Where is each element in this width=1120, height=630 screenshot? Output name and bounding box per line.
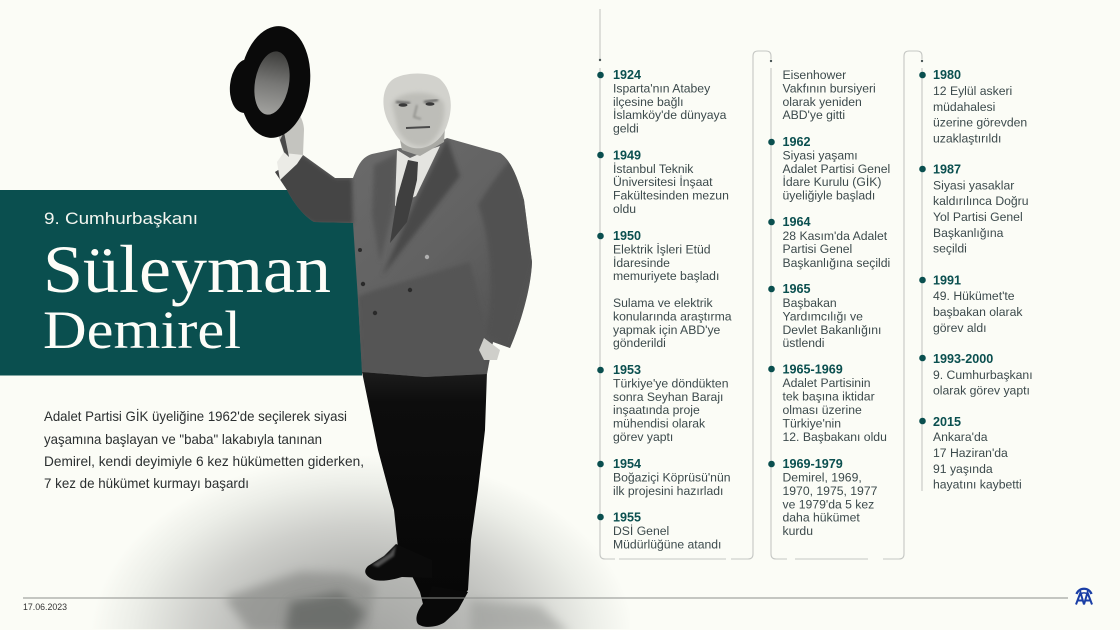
- entry 1969-1979: 1969-1979: [782, 457, 843, 471]
- entry 1965-1969: Türkiye'nin: [782, 416, 841, 430]
- entry 1969-1979: daha hükümet: [782, 510, 860, 524]
- entry 1962: Adalet Partisi Genel: [782, 162, 890, 176]
- entry 1969-1979: ve 1979'da 5 kez: [782, 498, 874, 512]
- entry 1954: 1954: [613, 457, 641, 471]
- entry 1950 continued: Vakfının bursiyeri: [782, 82, 876, 96]
- entry 1949: oldu: [613, 202, 636, 216]
- entry 2015: 91 yaşında: [933, 462, 993, 476]
- entry 1980: üzerine görevden: [933, 116, 1027, 130]
- entry 1953: mühendisi olarak: [613, 416, 706, 430]
- entry 1969-1979: Demirel, 1969,: [782, 470, 862, 484]
- entry 1965-1969: Adalet Partisinin: [782, 376, 871, 390]
- entry 1991: [919, 274, 1023, 335]
- entry 1962: 1962: [782, 135, 811, 149]
- entry 1965-1969: [768, 362, 887, 444]
- entry 1924: Isparta'nın Atabey: [613, 82, 711, 96]
- entry 1964: Başkanlığına seçildi: [782, 256, 890, 270]
- entry 1950: İdaresinde: [613, 256, 670, 270]
- intro paragraph: 7 kez de hükümet kurmayı başardı: [44, 476, 249, 491]
- entry 1980: [919, 68, 1027, 146]
- entry 2015: 2015: [933, 415, 961, 429]
- buttons: [358, 248, 412, 315]
- footer rule: [23, 598, 1068, 599]
- entry 1949: Fakültesinden mezun: [613, 188, 729, 202]
- entry 1991: 1991: [933, 274, 961, 288]
- entry 1965-1969: 1965-1969: [782, 362, 843, 376]
- title: Demirel: Demirel: [43, 300, 241, 360]
- entry 1949: Üniversitesi İnşaat: [613, 175, 713, 189]
- entry 1993-2000: olarak görev yaptı: [933, 384, 1030, 398]
- timeline column 2: [768, 68, 890, 538]
- entry 1987: [919, 162, 1029, 256]
- entry 1965: [768, 282, 881, 350]
- entry 1965: Devlet Bakanlığını: [782, 323, 881, 337]
- entry 1965: 1965: [782, 282, 811, 296]
- entry 1955: DSİ Genel: [613, 524, 669, 538]
- entry 1949: [597, 148, 729, 216]
- entry 1991: görev aldı: [933, 321, 987, 335]
- entry 1969-1979: [768, 457, 878, 538]
- entry 1950: konularında araştırma: [613, 310, 732, 324]
- entry 1965-1969: tek başına iktidar: [782, 390, 875, 404]
- entry 1987: Yol Partisi Genel: [933, 210, 1023, 224]
- entry 1950: Sulama ve elektrik: [613, 296, 713, 310]
- entry 1955: 1955: [613, 510, 641, 524]
- entry 1953: inşaatında proje: [613, 403, 700, 417]
- timeline connector lines: [600, 9, 922, 559]
- entry 1987: kaldırılınca Doğru: [933, 194, 1029, 208]
- entry 1964: 28 Kasım'da Adalet: [782, 229, 888, 243]
- intro paragraph: Adalet Partisi GİK üyeliğine 1962'de seçilerek siyasi: [44, 409, 347, 424]
- intro paragraph: [44, 409, 364, 491]
- entry 1950 continued: ABD'ye gitti: [782, 108, 845, 122]
- entry 1980: 12 Eylül askeri: [933, 84, 1012, 98]
- rocky ground behind figure: [113, 470, 612, 629]
- title: Süleyman: Süleyman: [43, 231, 331, 307]
- entry 1969-1979: kurdu: [782, 524, 813, 538]
- entry 1964: Partisi Genel: [782, 242, 852, 256]
- neck: [398, 128, 445, 156]
- entry 1962: üyeliğiyle başladı: [782, 188, 875, 202]
- entry 1924: ilçesine bağlı: [613, 95, 683, 109]
- entry 1954: Boğaziçi Köprüsü'nün: [613, 470, 731, 484]
- entry 1954: [597, 457, 731, 498]
- entry 1980: müdahalesi: [933, 100, 995, 114]
- entry 1964: [768, 215, 890, 270]
- hat inside: [250, 49, 294, 117]
- entry 2015: Ankara'da: [933, 430, 988, 444]
- date: 17.06.2023: [23, 602, 67, 612]
- shirt: [395, 146, 440, 206]
- entry 1924: İslamköy'de dünyaya: [613, 108, 727, 122]
- entry 1953: görev yaptı: [613, 430, 673, 444]
- entry 1965-1969: 12. Başbakanı oldu: [782, 430, 887, 444]
- entry 1965-1969: olması üzerine: [782, 403, 862, 417]
- entry 2015: [919, 415, 1022, 492]
- panel: title band: [0, 190, 362, 376]
- entry 1924: 1924: [613, 68, 641, 82]
- tie: [390, 160, 418, 243]
- pin: [425, 255, 429, 259]
- icon: AA logo: [1076, 589, 1092, 604]
- entry 1950: yapmak için ABD'ye: [613, 323, 721, 337]
- raised arm and jacket: [275, 138, 532, 377]
- entry 1950: 1950: [613, 229, 641, 243]
- entry 1953: 1953: [613, 363, 641, 377]
- shirt cuff: [277, 152, 303, 180]
- entry 1924: geldi: [613, 122, 639, 136]
- right shoe: [416, 586, 468, 627]
- subtitle: 9. Cumhurbaşkanı: [44, 210, 198, 228]
- intro paragraph: Demirel, kendi deyimiyle 6 kez hükümetten giderken,: [44, 454, 364, 469]
- entry 1987: 1987: [933, 162, 961, 176]
- entry 2015: hayatını kaybetti: [933, 478, 1022, 492]
- left shoe: [365, 544, 432, 581]
- entry 1993-2000: 9. Cumhurbaşkanı: [933, 368, 1033, 382]
- entry 1955: Müdürlüğüne atandı: [613, 538, 721, 552]
- entry 1950: gönderildi: [613, 336, 666, 350]
- entry 1950 continued: olarak yeniden: [782, 95, 862, 109]
- hat: [227, 23, 316, 141]
- trousers: [362, 372, 487, 624]
- entry 1953: Türkiye'ye döndükten: [613, 376, 728, 390]
- head: [383, 73, 451, 148]
- entry 1962: Siyasi yaşamı: [782, 148, 858, 162]
- entry 1980: 1980: [933, 68, 961, 82]
- entry 1950 continued: Eisenhower: [782, 68, 846, 82]
- entry 1965: üstlendi: [782, 336, 825, 350]
- jacket shading and lapels: [270, 138, 534, 378]
- hand: [279, 106, 304, 155]
- entry 1987: Başkanlığına: [933, 226, 1004, 240]
- entry 1969-1979: 1970, 1975, 1977: [782, 484, 878, 498]
- entry 1953: [597, 363, 728, 444]
- entry 1950: Elektrik İşleri Etüd: [613, 242, 711, 256]
- entry 1950: [597, 229, 732, 350]
- figure: Süleyman Demirel raising his hat: [227, 23, 534, 627]
- timeline column 1: [597, 68, 732, 552]
- entry 2015: 17 Haziran'da: [933, 446, 1008, 460]
- intro paragraph: yaşamına başlayan ve "baba" lakabıyla tanınan: [44, 432, 322, 447]
- entry 1953: sonra Seyhan Barajı: [613, 390, 723, 404]
- timeline arrow tips: [599, 59, 923, 62]
- entry 1949: 1949: [613, 148, 641, 162]
- hand in pocket: [479, 338, 500, 360]
- entry 1987: Siyasi yasaklar: [933, 178, 1014, 192]
- entry 1950 continued: [782, 68, 876, 122]
- entry 1950: memuriyete başladı: [613, 269, 719, 283]
- entry 1964: 1964: [782, 215, 811, 229]
- entry 1955: [597, 510, 721, 552]
- entry 1954: ilk projesini hazırladı: [613, 484, 723, 498]
- entry 1965: Başbakan: [782, 296, 837, 310]
- entry 1993-2000: 1993-2000: [933, 352, 993, 366]
- entry 1965: Yardımcılığı ve: [782, 310, 863, 324]
- entry 1991: başbakan olarak: [933, 305, 1023, 319]
- entry 1924: [597, 68, 727, 136]
- entry 1949: İstanbul Teknik: [613, 162, 694, 176]
- entry 1962: [768, 135, 890, 202]
- timeline column 3: [919, 68, 1033, 492]
- entry 1987: seçildi: [933, 242, 967, 256]
- entry 1962: İdare Kurulu (GİK): [782, 175, 881, 189]
- entry 1993-2000: [919, 352, 1033, 398]
- entry 1980: uzaklaştırıldı: [933, 132, 1001, 146]
- entry 1991: 49. Hükümet'te: [933, 289, 1015, 303]
